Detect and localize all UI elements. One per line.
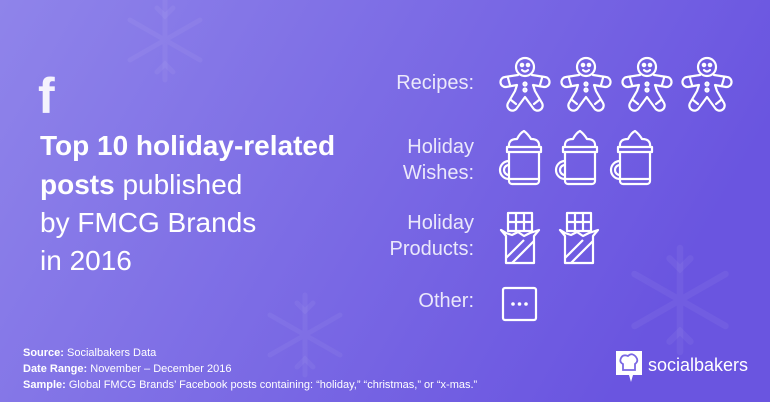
icon: other	[503, 288, 536, 320]
title	[40, 130, 335, 276]
title: by FMCG Brands	[40, 207, 256, 238]
logo: socialbakers	[616, 351, 748, 382]
icons: chocolate holiday products	[501, 213, 598, 263]
category labels	[390, 72, 474, 312]
icons: gingerbread recipes	[500, 58, 732, 111]
logo: socialbakers: socialbakers	[648, 355, 748, 375]
icon: facebook: f	[38, 68, 55, 124]
category labels: Recipes:	[396, 72, 474, 94]
category labels: Holiday	[407, 212, 474, 234]
icons: mugs holiday wishes	[500, 131, 652, 184]
title: in 2016	[40, 245, 132, 276]
category labels: Wishes:	[403, 162, 474, 184]
title: Top 10 holiday-related	[40, 130, 335, 161]
category labels: Other:	[418, 290, 474, 312]
category labels: Holiday	[407, 136, 474, 158]
footnote: Sample: Global FMCG Brands’ Facebook posts containing: “holiday,” “christmas,” or “x-mas.”	[23, 379, 478, 391]
title: posts published	[40, 169, 242, 200]
footnote	[23, 347, 478, 391]
footnote: Source: Socialbakers Data	[23, 347, 157, 359]
footnote: Date Range: November – December 2016	[23, 363, 231, 375]
category labels: Products:	[390, 238, 474, 260]
